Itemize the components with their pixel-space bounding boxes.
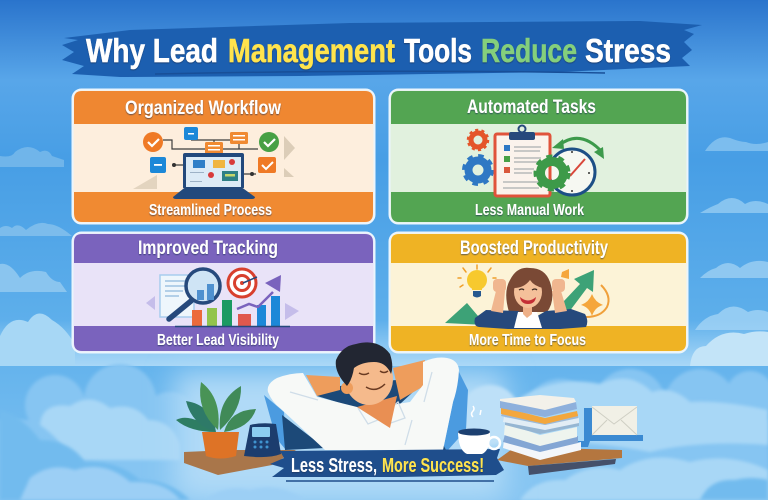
right forearm <box>393 360 425 400</box>
slogan text: Less Stress, <box>291 455 377 477</box>
automation icon <box>464 126 604 196</box>
desk phone <box>244 423 281 457</box>
title banner <box>62 21 702 77</box>
orange gear <box>468 130 488 150</box>
clipboard <box>495 126 550 196</box>
panel: automated tasks <box>390 90 688 224</box>
tracking chart icon <box>146 268 299 326</box>
flow diagram icon <box>133 127 295 199</box>
ear <box>341 382 353 394</box>
caption: More Time to Focus <box>469 332 586 349</box>
title text: Tools <box>404 32 472 69</box>
heading: Boosted Productivity <box>460 238 608 259</box>
panel: improved tracking <box>72 232 374 352</box>
pot <box>202 432 239 458</box>
title text: Stress <box>585 32 671 69</box>
lighter clouds <box>40 379 768 500</box>
panel: organized workflow <box>72 90 374 224</box>
title text: Management <box>228 32 395 69</box>
title text: Reduce <box>481 32 577 69</box>
title text <box>86 32 671 69</box>
face <box>359 371 388 389</box>
productivity icon <box>445 265 609 329</box>
relaxed man <box>264 342 468 450</box>
slogan text: More Success! <box>382 455 484 477</box>
book stack <box>500 395 581 460</box>
caption: Better Lead Visibility <box>157 332 279 349</box>
horizon band <box>0 320 768 366</box>
soft centre glow <box>175 372 505 500</box>
plant <box>176 382 256 458</box>
clouds <box>0 137 768 500</box>
left desk <box>184 450 296 475</box>
blue gear <box>464 156 492 184</box>
head <box>345 353 393 405</box>
left forearm <box>306 375 340 396</box>
right desk <box>497 447 622 475</box>
bright horizon clouds <box>0 313 768 366</box>
clock <box>549 149 595 195</box>
slogan banner <box>270 449 504 481</box>
star and orbit <box>561 269 609 317</box>
brush stroke <box>62 21 702 77</box>
coffee cup <box>458 406 500 454</box>
green gear <box>536 156 568 190</box>
glow behind cup <box>460 385 520 445</box>
woman <box>474 268 587 329</box>
darker lower clouds <box>0 410 768 500</box>
side clouds <box>0 137 768 330</box>
shirt folds <box>290 372 432 445</box>
chair wings <box>264 370 468 450</box>
lower cloud bank <box>0 364 768 500</box>
cycle arrow <box>552 138 604 159</box>
growth arrow <box>445 270 594 326</box>
title text: Why Lead <box>86 32 218 69</box>
caption: Streamlined Process <box>149 202 272 219</box>
light bulb <box>458 265 496 298</box>
heading: Improved Tracking <box>138 238 278 259</box>
shirt <box>268 358 459 450</box>
heading: Automated Tasks <box>467 97 596 118</box>
hair <box>336 342 392 386</box>
panel: boosted productivity <box>390 232 688 352</box>
heading: Organized Workflow <box>125 98 281 119</box>
slogan text <box>291 455 484 477</box>
chair back <box>282 380 446 450</box>
neck <box>357 396 397 428</box>
caption: Less Manual Work <box>475 202 584 219</box>
leaves <box>176 382 256 432</box>
bottom puffs <box>20 467 305 500</box>
envelope <box>575 406 643 447</box>
